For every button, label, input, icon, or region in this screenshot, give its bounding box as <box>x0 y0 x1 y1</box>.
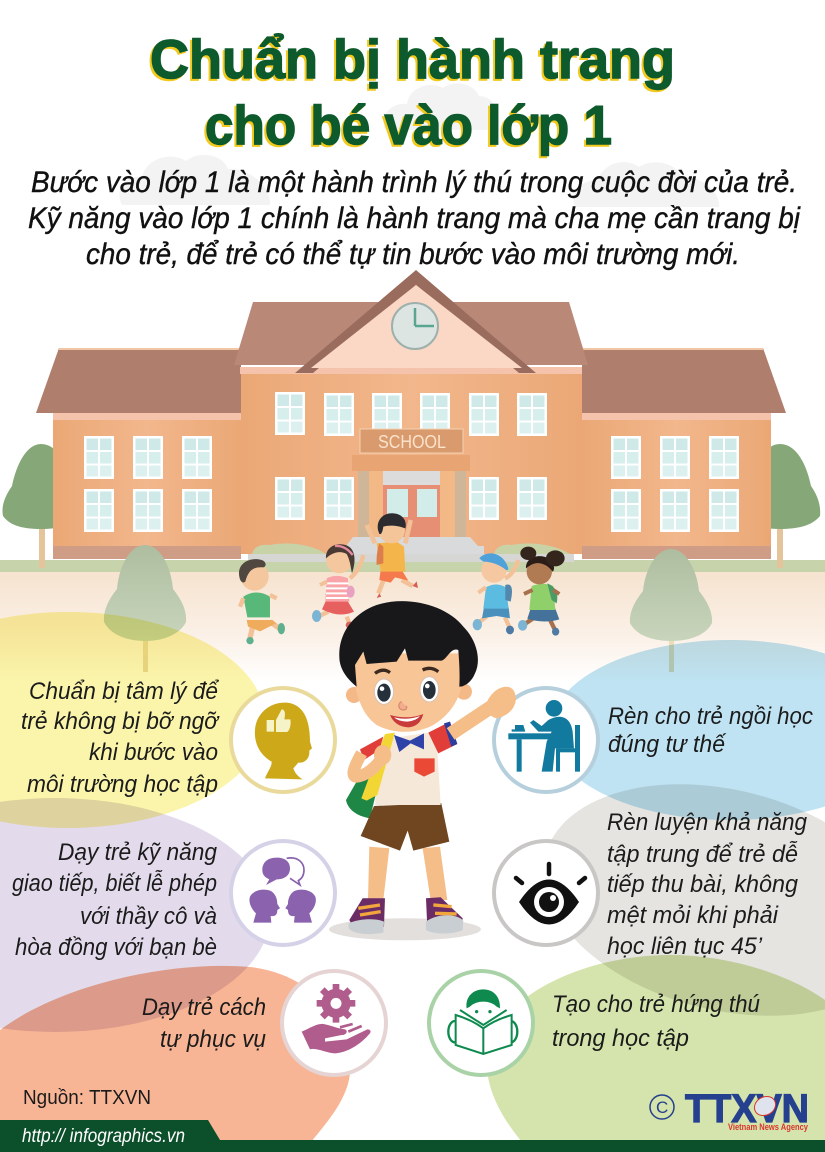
item: self-service <box>142 971 386 1075</box>
footer bar <box>0 1120 825 1152</box>
TTXVN logo: C <box>656 1098 668 1117</box>
sleeves <box>428 722 457 753</box>
text: concentration: học liên tục 45’ <box>607 933 763 960</box>
entrance <box>248 455 574 562</box>
item: concentration <box>494 809 807 960</box>
item: communication skills <box>12 839 335 961</box>
text: concentration: Rèn luyện khả năng <box>607 809 807 836</box>
icon: head with thumbs up <box>231 688 335 792</box>
text: self-service: Dạy trẻ cách <box>142 994 266 1021</box>
shirt <box>375 733 441 805</box>
shorts <box>361 803 449 851</box>
brows <box>375 668 438 673</box>
hair <box>339 601 478 687</box>
TTXVN logo: Vietnam News Agency <box>728 1122 808 1132</box>
text: communication skills: Dạy trẻ kỹ năng <box>58 839 217 866</box>
intro text <box>28 166 801 271</box>
colored blobs <box>0 612 825 1152</box>
icon: child at desk <box>494 688 598 792</box>
TTXVN logo: TTXVN <box>685 1087 809 1131</box>
head <box>339 601 478 732</box>
footer bar: http:// infographics.vn <box>22 1126 185 1147</box>
background clouds <box>119 83 719 207</box>
ground shadow <box>329 918 481 940</box>
text: concentration: mệt mỏi khi phải <box>607 902 779 929</box>
text: communication skills: hòa đồng với bạn bè <box>15 934 217 961</box>
main boy character <box>329 601 516 940</box>
text: psychological preparation: Chuẩn bị tâm lý để <box>29 678 219 705</box>
intro text: cho trẻ, để trẻ có thể tự tin bước vào môi trường mới. <box>86 238 740 271</box>
title: cho bé vào lớp 1 <box>205 94 612 156</box>
icon: two heads talking <box>231 841 335 945</box>
text: psychological preparation: trẻ không bị bỡ ngỡ <box>21 708 220 735</box>
child: striped girl <box>312 544 363 628</box>
text: psychological preparation: môi trường học tập <box>27 771 218 798</box>
clock <box>392 303 438 349</box>
right wing <box>582 348 786 559</box>
trees <box>2 444 820 568</box>
faded shrubs <box>104 545 712 672</box>
icon: eye <box>494 841 598 945</box>
left wing <box>36 348 241 559</box>
raised arm <box>451 687 516 734</box>
item: interest in learning <box>429 971 760 1075</box>
group of children <box>239 513 565 644</box>
legs <box>368 847 447 900</box>
icon: gear on hand <box>282 971 386 1075</box>
child: blue cap boy <box>473 553 518 634</box>
text: sitting posture: đúng tư thế <box>608 731 727 758</box>
child: jumping boy <box>367 513 418 598</box>
text: communication skills <box>12 839 217 961</box>
title: Chuẩn bị hành trang <box>150 28 675 90</box>
text: concentration: tập trung để trẻ dễ <box>607 840 798 868</box>
child: green shirt <box>239 559 285 644</box>
child: bun girl <box>518 547 565 636</box>
item: sitting posture <box>494 688 813 792</box>
nose <box>399 702 407 710</box>
collar <box>394 733 424 752</box>
text: concentration <box>607 809 807 960</box>
text: psychological preparation <box>21 678 220 798</box>
yellow strap <box>361 733 395 801</box>
ground <box>0 560 825 682</box>
eyes <box>374 679 394 704</box>
title <box>150 28 675 156</box>
source: Nguồn: TTXVN <box>23 1087 151 1109</box>
backpack <box>346 770 380 818</box>
icon: child reading book <box>429 971 533 1075</box>
school building <box>36 270 786 562</box>
text: communication skills: với thầy cô và <box>80 903 217 930</box>
text: self-service <box>142 994 266 1053</box>
text: psychological preparation: khi bước vào <box>89 739 218 766</box>
mouth <box>390 714 423 727</box>
text: interest in learning: Tạo cho trẻ hứng thú <box>552 991 760 1018</box>
text: communication skills: giao tiếp, biết lễ phép <box>12 869 217 897</box>
central block <box>234 270 588 554</box>
school sign: SCHOOL <box>378 432 446 452</box>
text: concentration: tiếp thu bài, không <box>607 871 798 898</box>
text: interest in learning <box>552 991 760 1052</box>
text: sitting posture <box>608 703 813 758</box>
pocket <box>414 758 435 777</box>
school sign <box>360 429 463 453</box>
bent arm <box>353 745 391 777</box>
shoes <box>349 897 463 934</box>
text: interest in learning: trong học tập <box>552 1025 689 1052</box>
item: psychological preparation <box>21 678 335 798</box>
text: self-service: tự phục vụ <box>160 1026 266 1053</box>
